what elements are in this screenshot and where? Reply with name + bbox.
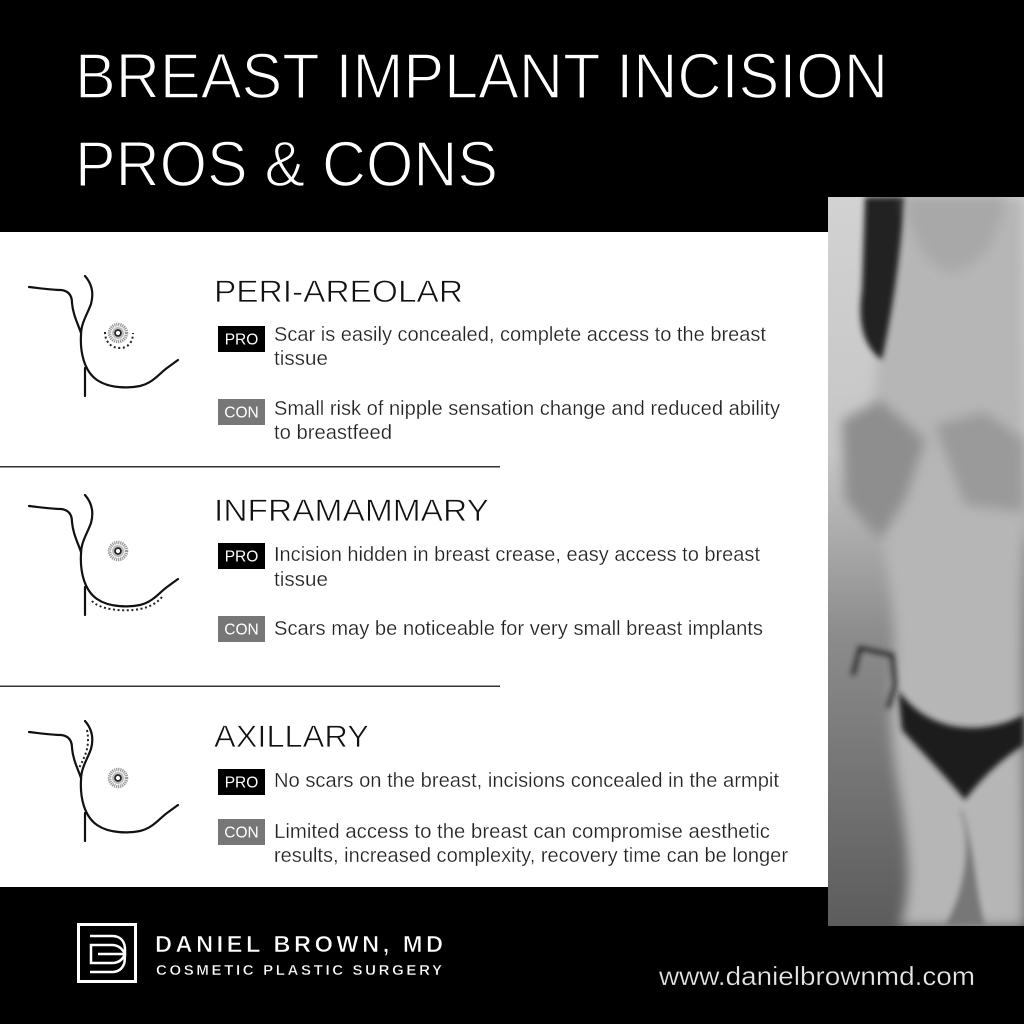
heading: peri-areolar: PERI-AREOLAR [214, 273, 463, 309]
pro row: peri-areolar [218, 323, 766, 370]
con row: axillary: CON [224, 824, 259, 842]
icon: inframammary incision diagram [29, 495, 178, 615]
section: peri-areolar [29, 273, 781, 444]
pro row: axillary: No scars on the breast, incisions concealed in the armpit [274, 769, 779, 792]
pro row: inframammary: tissue [274, 568, 328, 591]
pro row: inframammary [218, 543, 760, 591]
title [75, 40, 888, 200]
icon: peri-areolar incision diagram [29, 276, 178, 396]
heading: axillary: AXILLARY [214, 718, 369, 754]
title: PROS & CONS [75, 128, 498, 200]
pro row: peri-areolar: Scar is easily concealed, complete access to the breast [274, 323, 766, 346]
con row: peri-areolar: Small risk of nipple sensation change and reduced ability [274, 397, 781, 420]
icon: axillary incision diagram [29, 721, 178, 841]
pro row: peri-areolar: PRO [225, 332, 258, 348]
con row: peri-areolar: CON [224, 404, 259, 422]
brand name: COSMETIC PLASTIC SURGERY [156, 962, 442, 979]
photo placeholder: abstract tonal figure [828, 197, 1024, 926]
brand name: DANIEL BROWN, MD [155, 931, 443, 957]
pro row: inframammary: PRO [225, 548, 258, 566]
white content panel [0, 232, 828, 887]
con row: peri-areolar: to breastfeed [274, 421, 392, 444]
con row: axillary [218, 819, 788, 867]
pro row: axillary: PRO [225, 774, 258, 792]
con row: peri-areolar [218, 397, 781, 444]
con row: inframammary: Scars may be noticeable for very small breast implants [274, 617, 763, 640]
website url: www.danielbrownmd.com [658, 961, 975, 991]
title: BREAST IMPLANT INCISION [75, 40, 888, 112]
heading: inframammary: INFRAMAMMARY [214, 492, 489, 528]
con row: inframammary: CON [224, 622, 259, 638]
con row: axillary: results, increased complexity, recovery time can be longer [274, 844, 788, 867]
section: axillary [29, 718, 788, 867]
pro row: peri-areolar: tissue [274, 347, 328, 370]
logo: monogram [78, 924, 136, 982]
pro row: inframammary: Incision hidden in breast crease, easy access to breast [274, 543, 760, 566]
brand name [155, 931, 443, 979]
con row: axillary: Limited access to the breast can compromise aesthetic [274, 820, 770, 843]
section: inframammary [29, 492, 763, 642]
